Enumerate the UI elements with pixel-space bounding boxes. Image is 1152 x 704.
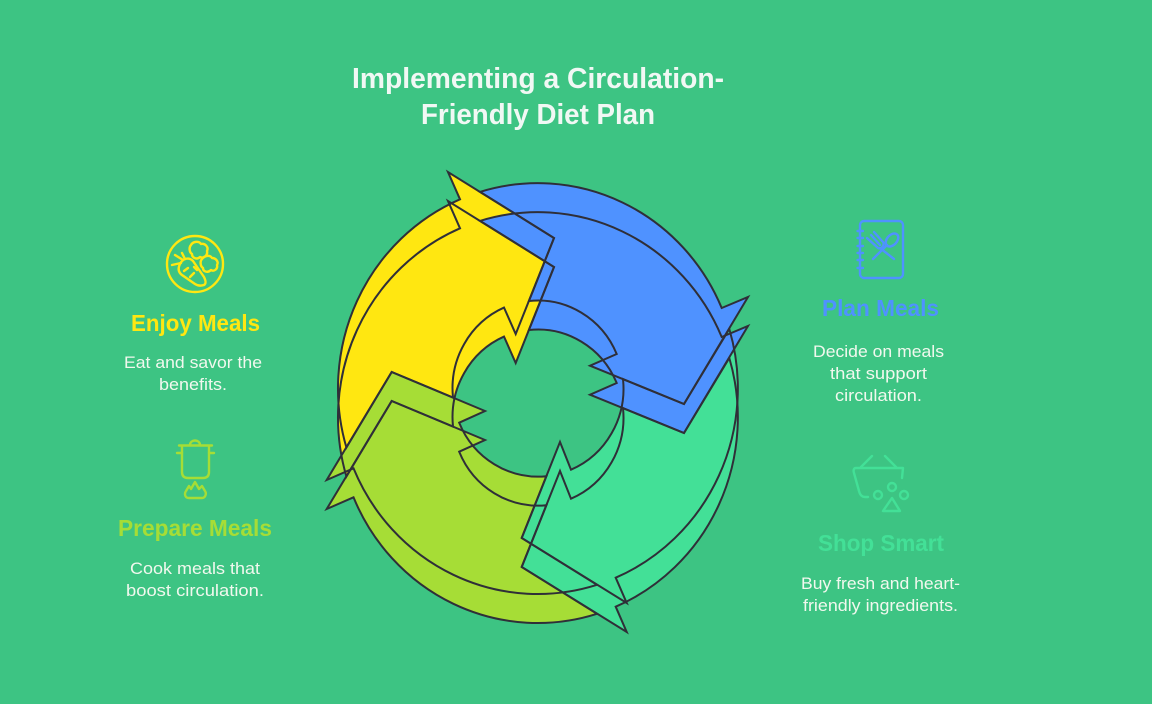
cycle diagram <box>327 172 748 632</box>
icon: cooking pot <box>177 440 214 498</box>
text: prepare meals description <box>126 559 264 600</box>
heading: prepare meals: Prepare Meals <box>118 515 272 541</box>
icon: carrot and broccoli <box>167 236 223 292</box>
heading: shop smart: Shop Smart <box>818 530 944 556</box>
text: shop smart description: friendly ingredients. <box>803 596 958 615</box>
text: enjoy meals description <box>124 353 262 394</box>
text: plan meals description: Decide on meals <box>813 342 944 361</box>
icon: recipe notebook <box>858 221 903 278</box>
arrow: prepare meals (lime) <box>327 372 597 623</box>
text: prepare meals description: boost circulation. <box>126 581 264 600</box>
text: prepare meals description: Cook meals that <box>130 559 260 578</box>
text: plan meals description: that support <box>830 364 927 383</box>
heading: plan meals: Plan Meals <box>822 295 939 321</box>
arrow: plan meals (blue) <box>480 183 748 433</box>
panel: prepare meals <box>118 440 272 600</box>
title <box>352 63 724 131</box>
panel: shop smart <box>801 456 960 615</box>
arrow: shop smart (green) <box>522 329 738 632</box>
panel: enjoy meals <box>124 236 262 394</box>
text: shop smart description: Buy fresh and heart- <box>801 574 960 593</box>
text: enjoy meals description: benefits. <box>159 375 227 394</box>
title: Implementing a Circulation- <box>352 63 724 95</box>
text: shop smart description <box>801 574 960 615</box>
arrow outlines <box>327 172 748 632</box>
icon: shopping basket <box>854 456 908 511</box>
text: plan meals description: circulation. <box>835 386 922 405</box>
panel: plan meals <box>813 221 944 405</box>
text: enjoy meals description: Eat and savor the <box>124 353 262 372</box>
arrow: enjoy meals (yellow) <box>338 172 554 476</box>
title: Friendly Diet Plan <box>421 99 655 131</box>
heading: enjoy meals: Enjoy Meals <box>131 310 260 336</box>
text: plan meals description <box>813 342 944 405</box>
